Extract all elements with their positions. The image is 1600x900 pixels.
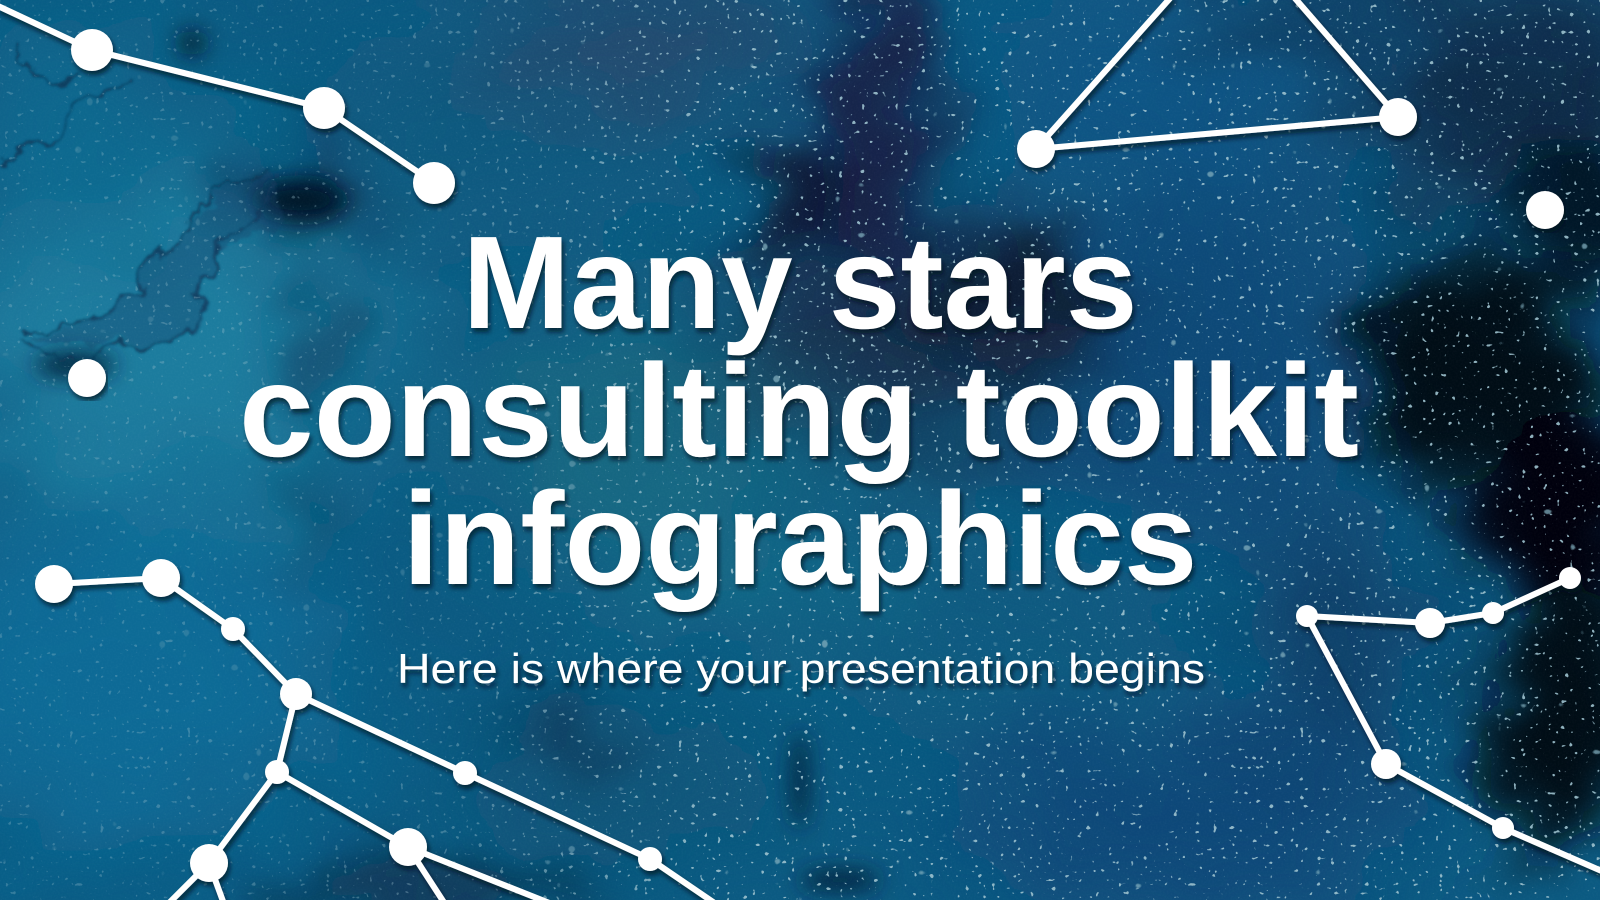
title: infographics — [402, 465, 1198, 612]
constellation: top right triangle — [1017, 0, 1417, 168]
constellation: top left — [0, 6, 455, 204]
star: right single — [1526, 191, 1564, 229]
constellation: bottom left — [35, 559, 716, 900]
title: Many stars — [462, 209, 1138, 356]
star: left single — [68, 359, 106, 397]
title: consulting toolkit — [239, 337, 1359, 484]
subtitle: Here is where your presentation begins — [397, 645, 1205, 692]
title — [239, 209, 1359, 612]
constellation: bottom right — [1296, 567, 1600, 872]
